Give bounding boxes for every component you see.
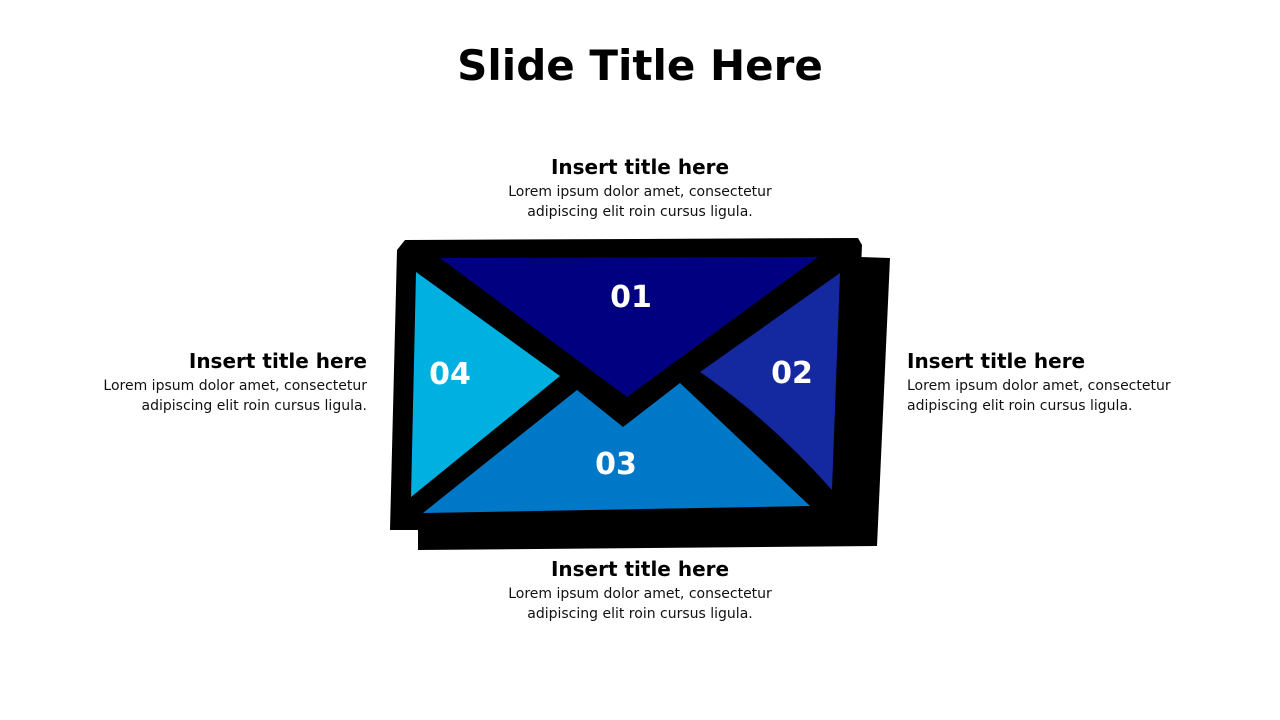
back black shape — [418, 257, 890, 550]
text block: right — [907, 349, 1171, 414]
text block: left: adipiscing elit roin cursus ligula. — [142, 398, 367, 414]
text block: bottom: Insert title here — [551, 557, 729, 581]
text block: top — [508, 155, 772, 220]
text block: left: Lorem ipsum dolor amet, consectetur — [103, 378, 367, 394]
text block: top: Insert title here — [551, 155, 729, 179]
text block: right: Lorem ipsum dolor amet, consectetur — [907, 378, 1171, 394]
segment 01: 01 — [610, 280, 652, 315]
segment 02 — [700, 273, 840, 490]
text block: right: Insert title here — [907, 349, 1085, 373]
text block: top: adipiscing elit roin cursus ligula. — [527, 204, 753, 220]
segment 04 — [411, 272, 560, 497]
text block: bottom — [508, 557, 772, 622]
text block: top: Lorem ipsum dolor amet, consectetur — [508, 184, 772, 200]
front black shape — [390, 238, 862, 530]
text block: right: adipiscing elit roin cursus ligula. — [907, 398, 1132, 414]
title: Slide Title Here — [457, 41, 823, 90]
segment 02: 02 — [771, 356, 813, 391]
text block: left: Insert title here — [189, 349, 367, 373]
segment 01 — [440, 257, 818, 397]
segment 04: 04 — [429, 357, 471, 392]
segment 03: 03 — [595, 447, 637, 482]
text block: left — [103, 349, 367, 414]
text block: bottom: Lorem ipsum dolor amet, consectetur — [508, 586, 772, 602]
segment 03 — [423, 383, 810, 513]
text block: bottom: adipiscing elit roin cursus ligula. — [527, 606, 753, 622]
